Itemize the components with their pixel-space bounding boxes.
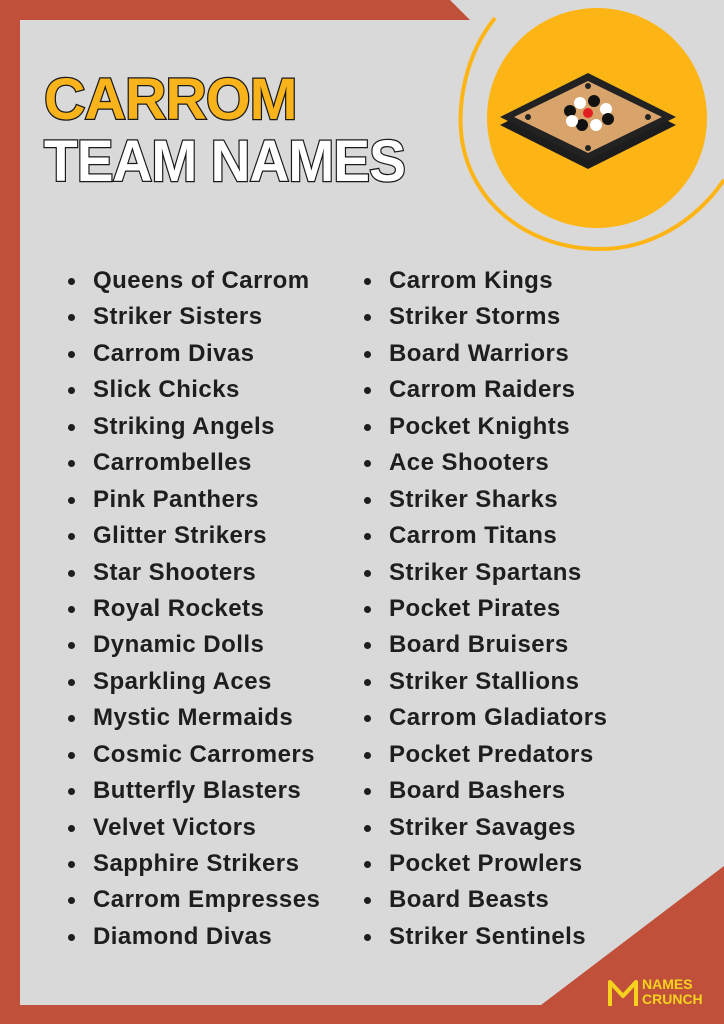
list: left column: Striker Sisters [93,303,263,330]
icon: carrom board in yellow circle [458,8,724,251]
list: right column: Striker Savages [389,814,576,841]
list: left column: Carrom Empresses [93,886,320,913]
list: right column: Board Beasts [389,886,549,913]
list: right column [364,267,607,950]
list: left column: Pink Panthers [93,486,259,513]
list: left column: Royal Rockets [93,595,264,622]
list: left column: Queens of Carrom [93,267,310,294]
list: left column: Butterfly Blasters [93,777,301,804]
list: left column: Sapphire Strikers [93,850,299,877]
list: left column [68,267,320,950]
list: right column: Striker Sentinels [389,923,586,950]
logo: Names Crunch [608,976,703,1007]
list: right column: Carrom Gladiators [389,704,607,731]
list: right column: Pocket Predators [389,741,594,768]
list: left column: Dynamic Dolls [93,631,264,658]
list: left column: Diamond Divas [93,923,272,950]
list: right column: Carrom Raiders [389,376,575,403]
list: right column: Striker Spartans [389,558,582,586]
list: left column: Striking Angels [93,413,275,440]
list: left column: Slick Chicks [93,376,240,403]
list: left column: Cosmic Carromers [93,741,315,768]
list: left column: Sparkling Aces [93,668,272,695]
title: CARROM: CARROM [44,67,296,132]
list: right column: Pocket Knights [389,413,570,440]
logo: Names Crunch: CRUNCH [642,991,703,1007]
list: right column: Carrom Titans [389,522,557,549]
list: right column: Ace Shooters [389,449,549,476]
logo: Names Crunch: NAMES [642,976,693,992]
list: right column: Board Bashers [389,777,566,804]
list: right column: Striker Sharks [389,486,558,513]
list: right column: Board Bruisers [389,631,569,658]
list: left column: Star Shooters [93,558,256,586]
list: right column: Pocket Pirates [389,595,561,622]
list: left column: Carrombelles [93,449,252,476]
list: left column: Mystic Mermaids [93,704,293,731]
list: right column: Carrom Kings [389,267,553,294]
list: right column: Board Warriors [389,340,569,367]
title: TEAM NAMES: TEAM NAMES [44,129,405,194]
list: right column: Striker Stallions [389,668,579,695]
list: left column: Carrom Divas [93,340,254,367]
list: left column: Velvet Victors [93,814,256,841]
list: right column: Pocket Prowlers [389,850,582,877]
list: left column: Glitter Strikers [93,522,267,549]
list: right column: Striker Storms [389,303,561,330]
